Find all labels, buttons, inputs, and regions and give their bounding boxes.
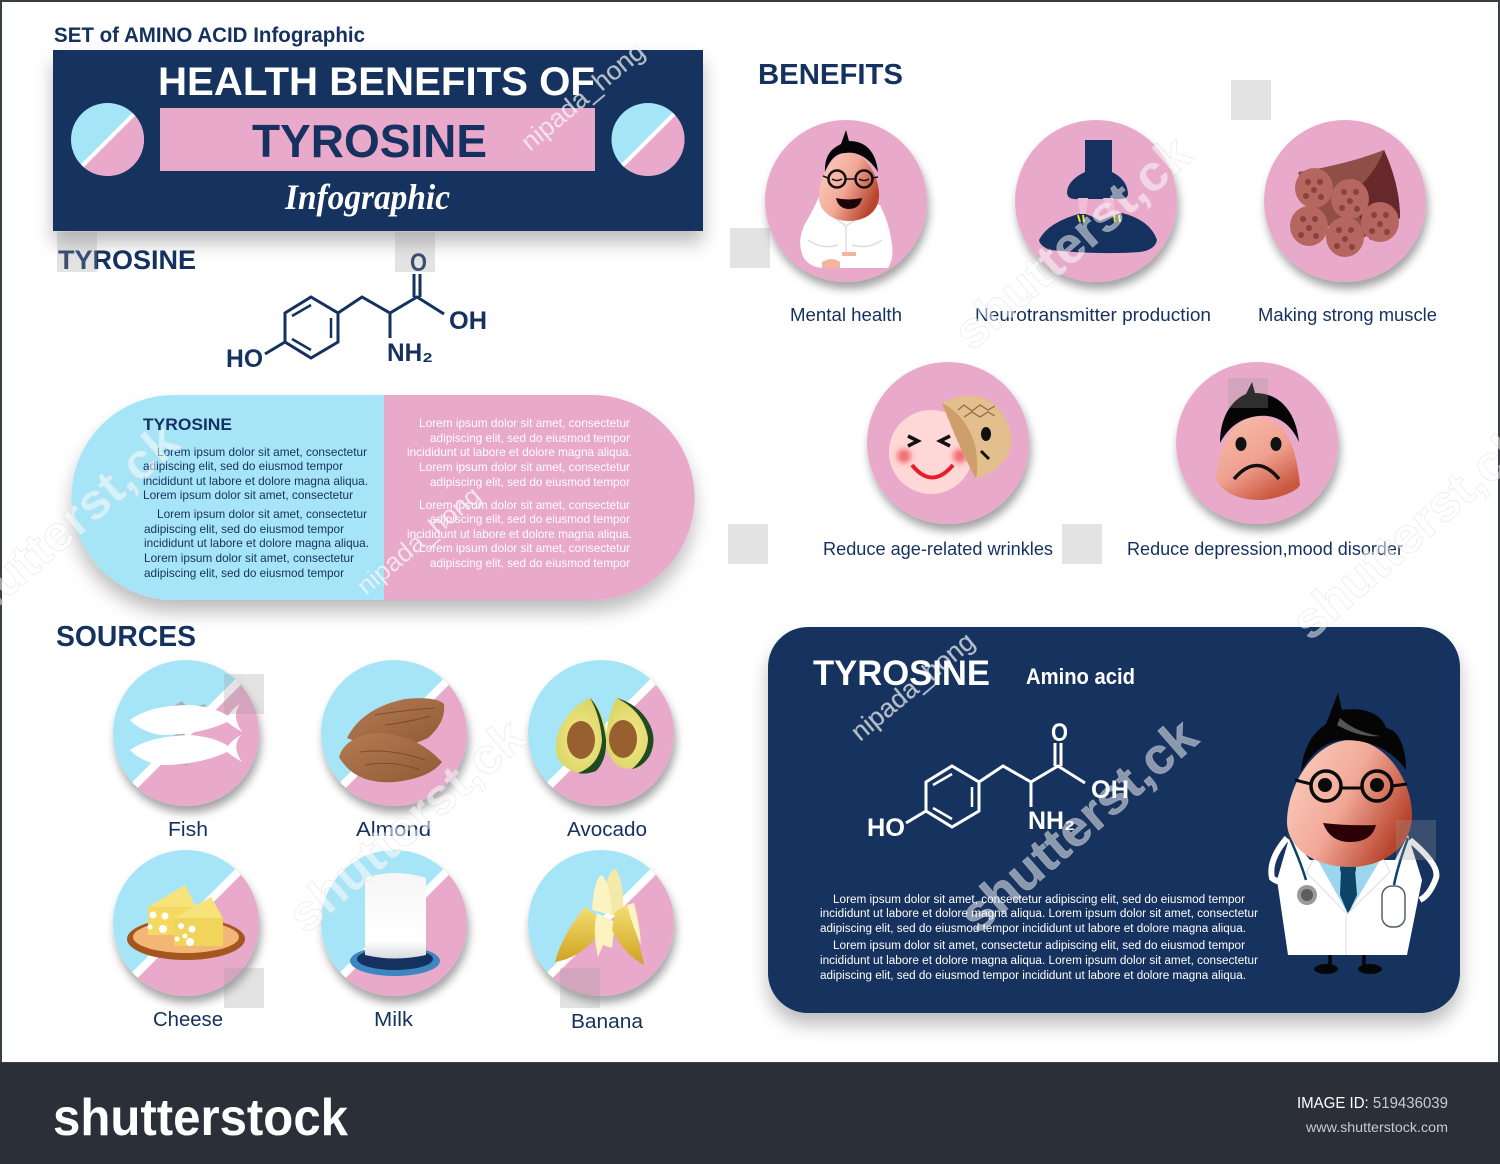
- icon: glass of milk: [350, 873, 440, 976]
- card body text: Lorem ipsum dolor sit amet, consectetur adipiscing elit, sed do eiusmod tempor: [833, 894, 1245, 906]
- tyrosine heading left: TYROSINE: [58, 245, 196, 275]
- watermark text: nipada_hong: [845, 626, 980, 747]
- card body text: adipiscing elit, sed do eiusmod tempor incididunt ut labore et dolore magna aliqua.: [820, 923, 1246, 935]
- chemical structure: white: NH₂: [1028, 807, 1075, 835]
- benefit: neurotransmitter: [1015, 120, 1177, 282]
- panel: capsule description: [72, 395, 695, 600]
- panel: amino acid card: [768, 627, 1460, 1013]
- title banner: [53, 50, 703, 231]
- infographic script: Infographic: [284, 177, 450, 217]
- source: milk: [314, 844, 474, 1004]
- top caption: SET of AMINO ACID Infographic: [54, 24, 365, 47]
- chemical structure: tyrosine: OH: [449, 307, 487, 335]
- capsule right text: Lorem ipsum dolor sit amet, consectetur: [419, 416, 630, 430]
- icon: avocado halves: [556, 698, 654, 774]
- label: Neurotransmitter production: [975, 305, 1211, 325]
- capsule right text: Lorem ipsum dolor sit amet, consectetur: [419, 460, 630, 474]
- card body text: incididunt ut labore et dolore magna aliqua. Lorem ipsum dolor sit amet, consectetur: [820, 908, 1258, 920]
- chemical structure: tyrosine: [226, 249, 487, 373]
- tyrosine ribbon: [160, 108, 595, 171]
- benefit: muscle: [1264, 120, 1426, 282]
- icon: left pill: [70, 102, 146, 178]
- benefit: wrinkles: [867, 362, 1029, 524]
- label: Reduce depression,mood disorder: [1127, 539, 1403, 559]
- source: banana: [521, 844, 681, 1004]
- watermark text: shutterst,ck: [948, 707, 1208, 943]
- capsule right text: Lorem ipsum dolor sit amet, consectetur: [419, 498, 630, 512]
- chemical structure: white: [867, 719, 1129, 842]
- chemical structure: tyrosine: HO: [226, 345, 263, 373]
- icon: almonds: [339, 698, 444, 782]
- icon: muscle fibres: [1290, 150, 1400, 257]
- watermark text: nipada_hong: [351, 480, 486, 601]
- label: Reduce age-related wrinkles: [823, 539, 1053, 559]
- label: Fish: [168, 819, 208, 841]
- footer bar: [0, 1063, 1500, 1164]
- capsule left text: adipiscing elit, sed do eiusmod tempor: [143, 459, 343, 473]
- capsule right text: adipiscing elit, sed do eiusmod tempor: [430, 431, 630, 445]
- source: almond: [314, 654, 474, 814]
- capsule left text: incididunt ut labore et dolore magna aliqua.: [143, 474, 368, 488]
- watermark text: shutterst,ck: [276, 707, 536, 943]
- label: Milk: [374, 1009, 414, 1031]
- chemical structure: white: HO: [867, 814, 905, 842]
- footer logo: shutterstock: [53, 1089, 348, 1147]
- tyrosine heading: TYROSINE: [252, 115, 487, 167]
- benefits heading: BENEFITS: [758, 59, 903, 91]
- capsule left text: incididunt ut labore et dolore magna aliqua.: [144, 536, 369, 550]
- watermark squares: [57, 80, 1436, 1008]
- capsule left text: Lorem ipsum dolor sit amet, consectetur: [144, 551, 354, 565]
- capsule shape: [72, 395, 695, 600]
- benefit: mental health: [765, 120, 927, 282]
- card heading: TYROSINE: [813, 654, 990, 693]
- sources heading: SOURCES: [56, 621, 196, 653]
- card subheading: Amino acid: [1026, 664, 1135, 689]
- icon: doctor character: [1271, 693, 1436, 974]
- capsule left text: Lorem ipsum dolor sit amet, consectetur: [157, 445, 367, 459]
- capsule left text: [143, 445, 369, 580]
- card body text: incididunt ut labore et dolore magna aliqua. Lorem ipsum dolor sit amet, consectetur: [820, 955, 1258, 967]
- source: fish: [106, 654, 266, 814]
- capsule left text: Lorem ipsum dolor sit amet, consectetur: [157, 507, 367, 521]
- chemical structure: tyrosine: O: [410, 249, 427, 277]
- label: Making strong muscle: [1258, 305, 1437, 325]
- chemical structure: white: O: [1051, 719, 1068, 747]
- card body text: adipiscing elit, sed do eiusmod tempor incididunt ut labore et dolore magna aliqua.: [820, 970, 1246, 982]
- capsule right text: adipiscing elit, sed do eiusmod tempor: [430, 512, 630, 526]
- image id: IMAGE ID: 519436039: [1297, 1095, 1448, 1112]
- label: Cheese: [153, 1009, 223, 1031]
- benefit: depression: [1176, 362, 1338, 524]
- capsule right text: Lorem ipsum dolor sit amet, consectetur: [419, 541, 630, 555]
- capsule left text: adipiscing elit, sed do eiusmod tempor: [144, 566, 344, 580]
- icon: two fish: [130, 701, 242, 766]
- label: Banana: [571, 1011, 644, 1033]
- icon: cheese plate: [127, 885, 245, 960]
- watermark text: shutterst,ck: [942, 124, 1202, 360]
- chemical structure: white: OH: [1091, 776, 1129, 804]
- card body text: Lorem ipsum dolor sit amet, consectetur adipiscing elit, sed do eiusmod tempor: [833, 940, 1245, 952]
- source: cheese: [106, 844, 266, 1004]
- capsule right text: adipiscing elit, sed do eiusmod tempor: [430, 556, 630, 570]
- capsule right text: incididunt ut labore et dolore magna aliqua.: [407, 445, 632, 459]
- icon: synapse: [1039, 140, 1157, 253]
- icon: right pill: [610, 102, 686, 178]
- capsule right text: [407, 416, 632, 570]
- label: Mental health: [790, 305, 902, 325]
- capsule left text: Lorem ipsum dolor sit amet, consectetur: [143, 488, 353, 502]
- heading line: HEALTH BENEFITS OF: [158, 60, 595, 104]
- label: Almond: [356, 819, 431, 841]
- icon: peeling face: [889, 396, 1012, 494]
- chemical structure: tyrosine: NH₂: [387, 339, 433, 367]
- card body text: [820, 894, 1258, 982]
- icon: meditating man: [800, 130, 892, 268]
- website: www.shutterstock.com: [1305, 1119, 1448, 1135]
- capsule left heading: TYROSINE: [143, 415, 232, 434]
- icon: peeled banana: [555, 869, 644, 965]
- source: avocado: [521, 654, 681, 814]
- capsule left text: adipiscing elit, sed do eiusmod tempor: [144, 522, 344, 536]
- watermark text: [0, 36, 1500, 943]
- icon: sad face: [1216, 382, 1300, 500]
- capsule right text: incididunt ut labore et dolore magna aliqua.: [407, 527, 632, 541]
- label: Avocado: [567, 819, 647, 841]
- capsule right text: adipiscing elit, sed do eiusmod tempor: [430, 475, 630, 489]
- watermark text: nipada_hong: [515, 36, 650, 157]
